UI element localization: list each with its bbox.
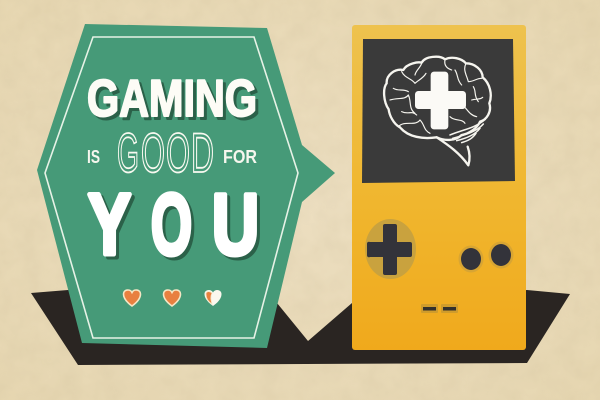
bubble inner outline <box>45 37 298 338</box>
button B <box>458 246 484 272</box>
title: you: Y <box>88 177 131 273</box>
title: you: O <box>154 180 195 276</box>
panel: yellow handheld console <box>352 25 526 350</box>
panel: green speech bubble <box>37 24 335 348</box>
title: you: O <box>151 177 192 273</box>
start button <box>441 304 458 313</box>
black ground shadow <box>31 290 570 365</box>
d-pad <box>367 224 412 275</box>
icon: half heart <box>204 290 222 306</box>
title: good: O <box>141 121 165 184</box>
brain outline <box>384 57 491 165</box>
title: you <box>88 177 262 276</box>
title: you: U <box>212 177 259 273</box>
select button <box>421 304 438 313</box>
title: you: U <box>215 180 262 276</box>
title: you: Y <box>91 180 134 276</box>
icon: brain with plus <box>384 57 491 165</box>
plus sign <box>415 72 466 129</box>
console screen <box>362 39 515 183</box>
icon: full heart <box>124 290 140 306</box>
title: is: IS <box>87 147 100 167</box>
title: gaming: GAMING <box>90 73 260 131</box>
title: gaming: GAMING <box>87 70 257 128</box>
console body <box>352 25 526 350</box>
title: good: O <box>166 121 190 184</box>
bubble shape <box>37 24 335 348</box>
icon: full heart <box>164 290 180 306</box>
title: good <box>117 121 214 184</box>
title: good: G <box>117 121 139 184</box>
title: good: D <box>191 121 214 184</box>
title: for: FOR <box>223 147 257 167</box>
button A <box>488 242 514 268</box>
d-pad well <box>365 219 416 279</box>
